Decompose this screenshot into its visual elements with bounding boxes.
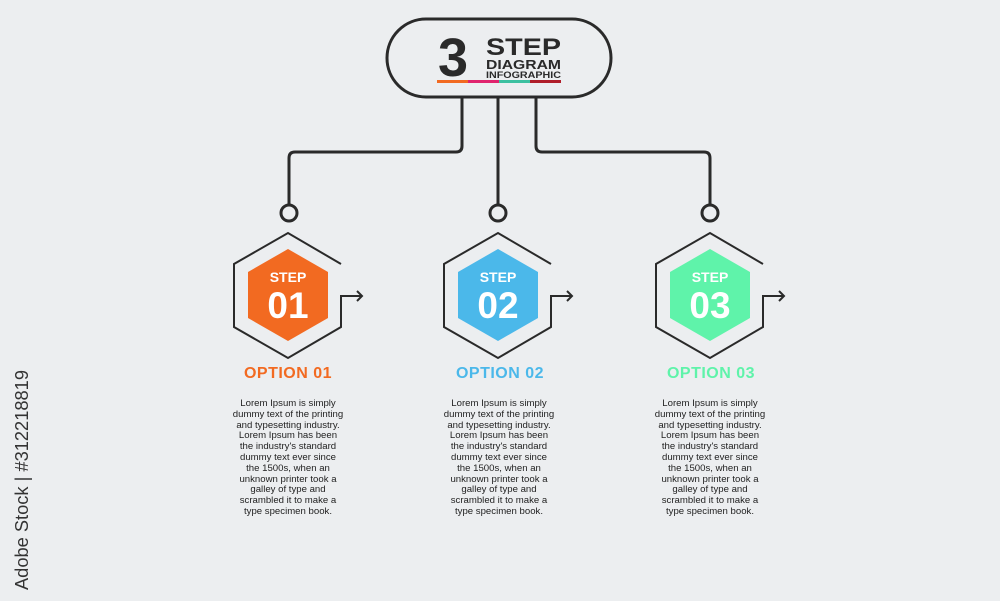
option 01 text: type specimen book. (244, 506, 332, 517)
hexagon step 02: 02 (477, 285, 519, 326)
title pill: DIAGRAM (486, 57, 561, 72)
option 03 text: unknown printer took a (661, 474, 759, 485)
hexagon step 03: 03 (689, 285, 731, 326)
option 03 text: and typesetting industry. (658, 420, 762, 431)
option 01 text: unknown printer took a (239, 474, 337, 485)
title pill (387, 19, 611, 97)
option 01 text: dummy text of the printing (233, 409, 343, 420)
title pill: INFOGRAPHIC (486, 70, 561, 81)
option 02 text: unknown printer took a (450, 474, 548, 485)
option 02 text: Lorem Ipsum has been (450, 430, 548, 441)
option 02 text: the 1500s, when an (457, 463, 541, 474)
option 03 text: scrambled it to make a (662, 495, 758, 506)
option 03 text: type specimen book. (666, 506, 754, 517)
option 03 text: Lorem Ipsum is simply (662, 398, 758, 409)
option 01 text: the 1500s, when an (246, 463, 330, 474)
option 02 text (444, 398, 554, 517)
option 02 text: the industry's standard (451, 441, 547, 452)
hexagon step 02: STEP (480, 269, 516, 285)
option 03 text: galley of type and (672, 484, 748, 495)
title pill: STEP (486, 34, 561, 61)
hexagon step 03: STEP (692, 269, 728, 285)
option 01 text: galley of type and (250, 484, 326, 495)
option 02 text: scrambled it to make a (451, 495, 547, 506)
option 01 text: Lorem Ipsum has been (239, 430, 337, 441)
hexagon step 01 (234, 233, 362, 358)
option 01 text: and typesetting industry. (236, 420, 340, 431)
option 01 text: dummy text ever since (240, 452, 336, 463)
option 01 title: OPTION 01 (244, 365, 332, 382)
hexagon step 02 (444, 233, 572, 358)
hexagon step 01: 01 (267, 285, 309, 326)
option 01 text: scrambled it to make a (240, 495, 336, 506)
hexagon step 01: STEP (270, 269, 306, 285)
option 03 title: OPTION 03 (667, 365, 755, 382)
option 02 text: Lorem Ipsum is simply (451, 398, 547, 409)
option 03 text: the industry's standard (662, 441, 758, 452)
option 01 text: the industry's standard (240, 441, 336, 452)
option 02 title: OPTION 02 (456, 365, 544, 382)
hexagon step 03 (656, 233, 784, 358)
option 03 text: dummy text of the printing (655, 409, 765, 420)
option 02 text: dummy text ever since (451, 452, 547, 463)
connector lines (281, 97, 718, 221)
watermark side text: Adobe Stock | #312218819 (12, 370, 32, 590)
option 02 text: dummy text of the printing (444, 409, 554, 420)
option 02 text: galley of type and (461, 484, 537, 495)
option 02 text: type specimen book. (455, 506, 543, 517)
option 01 text: Lorem Ipsum is simply (240, 398, 336, 409)
option 03 text (655, 398, 765, 517)
option 02 text: and typesetting industry. (447, 420, 551, 431)
option 03 text: Lorem Ipsum has been (661, 430, 759, 441)
option 01 text (233, 398, 343, 517)
title pill: 3 (438, 28, 468, 88)
option 03 text: dummy text ever since (662, 452, 758, 463)
option 03 text: the 1500s, when an (668, 463, 752, 474)
